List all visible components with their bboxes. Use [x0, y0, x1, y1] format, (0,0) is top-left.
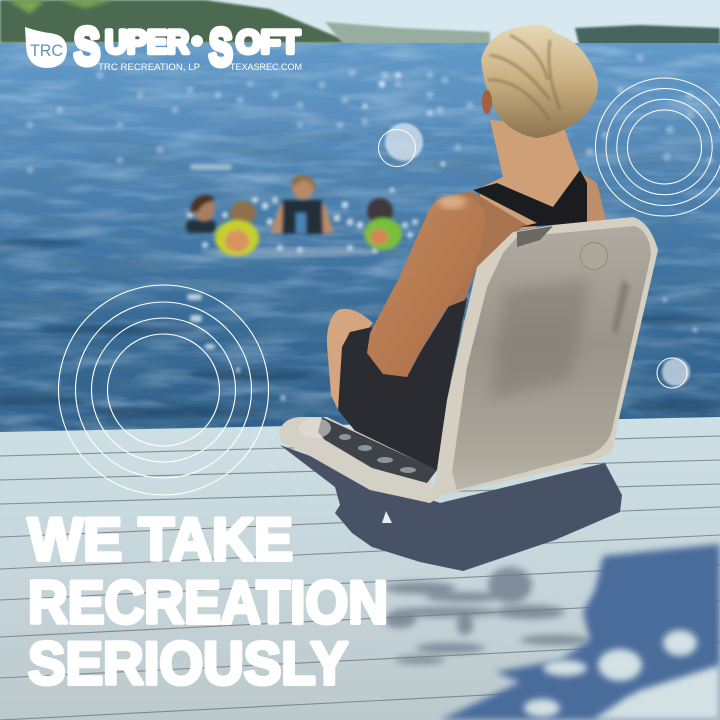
- arm: [367, 196, 486, 377]
- hair shading: [488, 35, 560, 120]
- swimmer facing viewer: [270, 175, 334, 234]
- seat pad: [279, 417, 432, 503]
- logo wordmark: UPER: [105, 24, 189, 60]
- shadow highlight notch: [382, 511, 392, 523]
- seat back worn patch: [490, 280, 590, 400]
- shorts and dress: [338, 293, 467, 470]
- sky: [0, 0, 720, 46]
- shoulder highlight: [438, 195, 466, 209]
- seat back face: [452, 226, 651, 490]
- right shoulder: [578, 171, 606, 224]
- logo wordmark: OFT: [236, 24, 300, 60]
- distant hills: [0, 0, 720, 48]
- logo wordmark: S: [74, 16, 100, 75]
- bare leg: [327, 309, 373, 410]
- swimmer with green ring: [364, 198, 402, 250]
- lake water: [0, 43, 720, 435]
- back: [440, 192, 527, 310]
- tank top: [473, 170, 587, 227]
- logo wordmark: [74, 16, 300, 77]
- headline line 3: SERIOUSLY: [28, 630, 348, 697]
- concentric rings: lower left: [58, 285, 268, 495]
- logo subtitle: company: TRC RECREATION, LP: [98, 62, 200, 72]
- seat back dark crease: [612, 280, 630, 335]
- concentric rings: upper right: [596, 78, 720, 216]
- logo: [25, 16, 302, 77]
- ear and sunglasses: [482, 90, 492, 114]
- headline: [28, 506, 388, 697]
- bubble: lower right: [657, 358, 690, 388]
- logo drop icon: TRC: [30, 41, 63, 60]
- logo drop icon: [25, 27, 67, 68]
- wooden dock: [0, 417, 720, 720]
- seat pad dimpled surface: [318, 417, 437, 483]
- water sparkles: [26, 54, 714, 174]
- dappled tree shadow: [384, 544, 720, 720]
- seat back circular mark: [580, 242, 608, 270]
- swimmer with black vest: [186, 195, 216, 233]
- swimmer with yellow ring: [215, 201, 259, 256]
- logo subtitle: website: TEXASREC.COM: [230, 62, 302, 72]
- hair: [481, 25, 598, 138]
- seat pad highlights: [299, 418, 416, 473]
- headline line 1: WE TAKE: [28, 506, 293, 573]
- chair shadow: [280, 445, 622, 571]
- headline line 2: RECREATION: [28, 569, 388, 636]
- neck and upper back: [480, 120, 580, 235]
- swimmers: [186, 175, 402, 256]
- dapple highlights: [524, 630, 720, 720]
- woman and chair: [279, 25, 658, 503]
- bubble: upper: [378, 123, 423, 166]
- logo wordmark: S: [209, 19, 233, 77]
- seat back foam edge: [424, 217, 658, 503]
- seat back top fold: [517, 226, 553, 247]
